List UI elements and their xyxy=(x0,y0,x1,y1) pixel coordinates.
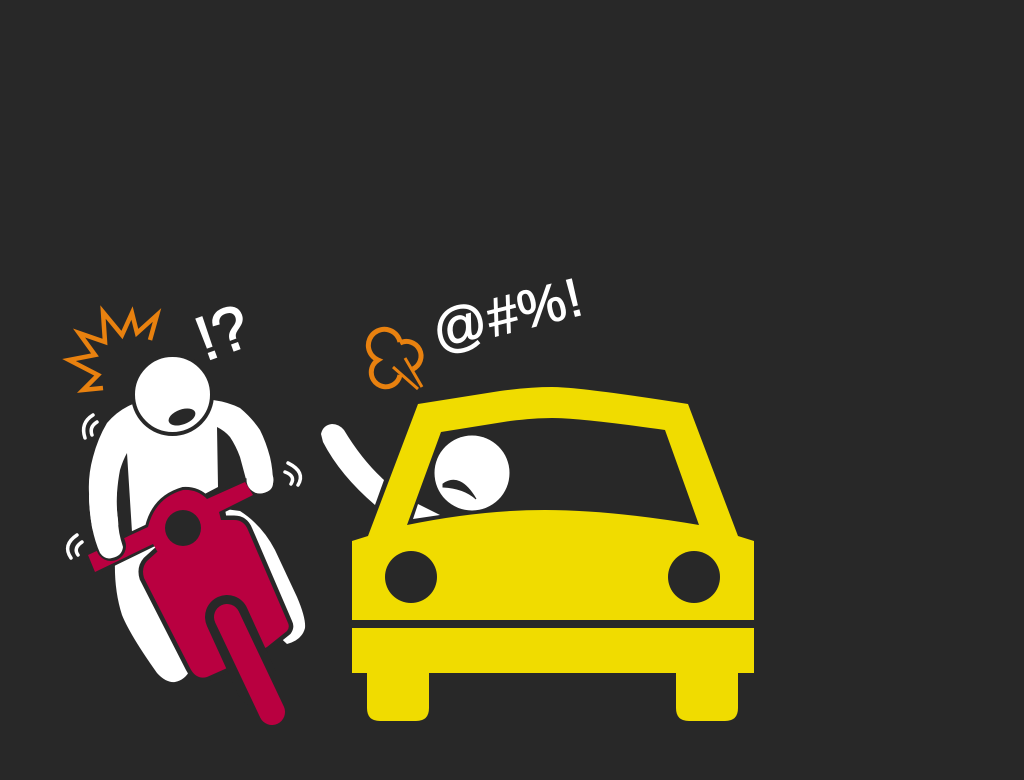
icon: shake marks xyxy=(68,415,300,558)
scooter xyxy=(88,482,289,712)
icon: orange anger puff xyxy=(368,329,422,389)
driver head xyxy=(434,436,510,510)
icon: orange impact burst xyxy=(69,312,157,390)
driver figure xyxy=(321,424,510,519)
left hand on handlebar xyxy=(89,493,123,558)
driver raised arm xyxy=(321,424,384,505)
car xyxy=(352,387,754,721)
rider torso and arms xyxy=(89,400,273,558)
car body and roof xyxy=(352,387,754,620)
right headlight xyxy=(668,551,720,603)
left hand outline xyxy=(107,535,111,546)
swear symbols text: @#%! xyxy=(426,267,588,362)
driver angry eye xyxy=(443,480,476,499)
left headlight xyxy=(385,551,437,603)
rider right leg xyxy=(225,509,305,644)
rider head xyxy=(133,355,212,434)
driver shoulder xyxy=(413,504,440,519)
car bumper and wheels xyxy=(352,628,754,721)
exclamation and question text: !? xyxy=(187,292,259,374)
rider left leg xyxy=(115,540,190,682)
scooter front shield xyxy=(143,520,289,678)
scooter rider figure xyxy=(88,355,305,712)
wheel slot xyxy=(227,617,258,685)
scooter wheel xyxy=(227,617,272,712)
scooter headlight xyxy=(165,510,201,546)
rider mouth xyxy=(166,405,198,429)
handlebar outline xyxy=(88,482,253,572)
right hand on handlebar xyxy=(246,466,274,494)
scooter handlebar and hub xyxy=(88,482,253,572)
